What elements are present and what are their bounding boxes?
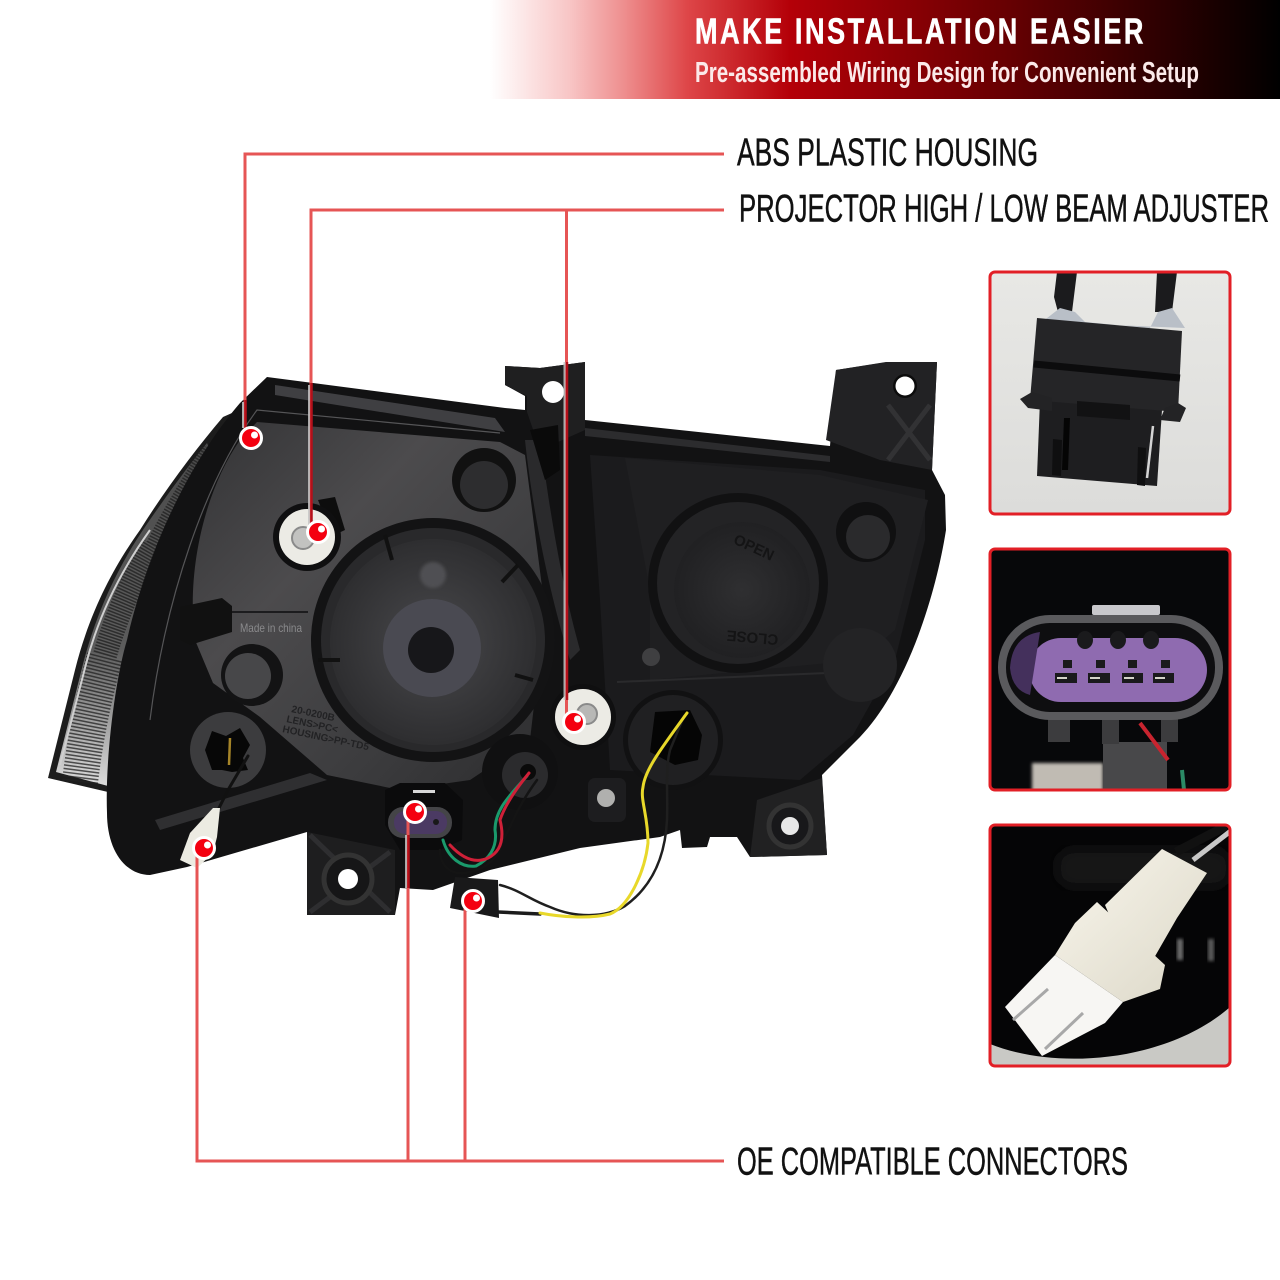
right dust cap [648, 493, 828, 673]
moulded part numbers: LENS>PC< [285, 714, 339, 736]
banner title: MAKE INSTALLATION EASIER [695, 11, 1143, 51]
top right bracket [826, 362, 937, 470]
marker: inline plug [462, 890, 484, 912]
housing body [107, 362, 946, 915]
right housing surface [590, 455, 925, 780]
four pin connector [385, 783, 463, 850]
right dust cap: OPEN [731, 531, 777, 565]
marker: left adjuster [308, 522, 328, 542]
made in china mark [180, 598, 308, 645]
abs housing leader [245, 154, 724, 438]
header banner [490, 0, 1280, 99]
detail panel: four pin connector [990, 549, 1230, 793]
projector adjuster leader [311, 210, 724, 722]
left adjuster bolt [273, 497, 345, 571]
left housing surface [193, 422, 545, 790]
marker: T10 plug [194, 838, 214, 858]
rubber plugs [221, 448, 897, 706]
made in china mark: Made in china [240, 621, 302, 635]
callout lines [197, 154, 724, 1161]
wiring grommet centre [482, 734, 558, 810]
bottom right bracket [750, 778, 827, 857]
wiring grommet right [623, 690, 723, 790]
right dust cap: CLOSE [726, 626, 779, 648]
right adjuster bolt [550, 684, 616, 750]
inner frame highlight [150, 410, 500, 720]
leader overlays on housing [243, 362, 567, 888]
marker: four pin connector [404, 802, 426, 822]
housing screw [588, 778, 626, 822]
T10 bulb plug [180, 808, 220, 868]
inline plug [450, 877, 499, 918]
moulded part numbers: 20-0200B [290, 704, 336, 724]
marker dots [194, 428, 584, 912]
marker: right adjuster [564, 712, 584, 732]
marker: housing [240, 428, 262, 448]
detail panel: T10 wedge plug [990, 825, 1232, 1066]
connectors leader [197, 812, 724, 1161]
headlight lens edge [48, 405, 250, 792]
headlight product [48, 362, 946, 918]
projector dust cap [311, 518, 555, 762]
bottom left bracket [307, 832, 395, 915]
moulded part numbers: HOUSING>PP-TD5 [281, 724, 370, 753]
bulb socket grommet [190, 712, 266, 788]
detail panel: two pin plug [990, 272, 1230, 514]
wires [218, 713, 687, 917]
moulded part numbers [281, 704, 370, 753]
top center bracket [505, 362, 585, 480]
callout label: abs plastic housing: ABS PLASTIC HOUSING [737, 132, 1038, 174]
